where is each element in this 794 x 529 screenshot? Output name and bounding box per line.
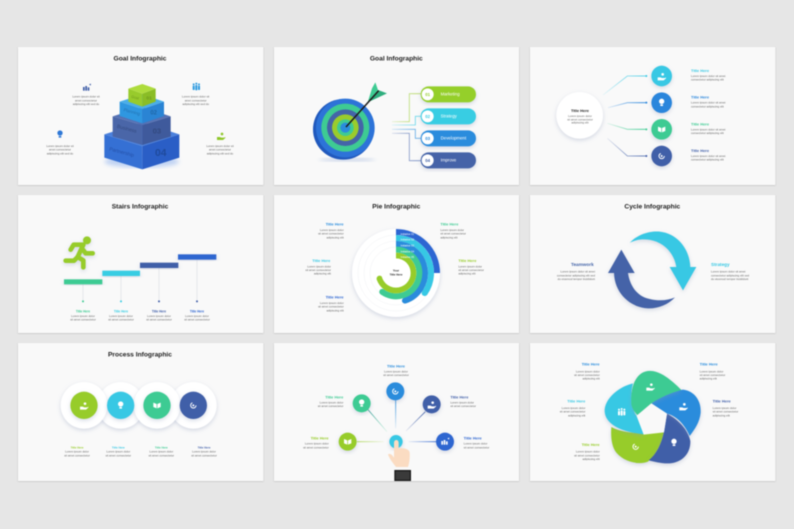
- text 1: [691, 68, 726, 82]
- target shadow: [319, 158, 375, 161]
- pill: marketing: Marketing: [441, 92, 460, 97]
- text 4: Lorem ipsum dolor: [185, 314, 209, 318]
- heading: Process Infographic: [108, 352, 172, 359]
- text 1: [70, 310, 96, 322]
- stems: [83, 260, 197, 301]
- text upper left: [318, 394, 344, 408]
- circle 2: [107, 392, 134, 419]
- central text: sit amet consectetur: [567, 117, 593, 121]
- pill: strategy: 02: [425, 114, 431, 119]
- text mid left: [305, 258, 331, 276]
- text top: [383, 363, 409, 377]
- panel: goal infographic target: [274, 47, 519, 185]
- text teamwork: consectetur adipiscing elit sed: [557, 273, 595, 277]
- text mid right: sit amet consectetur: [458, 268, 484, 272]
- text 3: [149, 445, 174, 457]
- panel: hub with four nodes: [530, 47, 775, 185]
- text bottom left: [574, 442, 600, 461]
- text lower right: sit amet consectetur: [464, 445, 489, 449]
- central text: adipiscing elit: [571, 121, 589, 125]
- text strategy: consectetur adipiscing elit sed: [711, 273, 750, 277]
- text 2: sit amet consectetur: [106, 453, 131, 457]
- text 4: Title Here: [190, 310, 204, 314]
- text mid left: sit amet consectetur: [560, 410, 585, 414]
- petal cyan: [605, 383, 644, 434]
- text top right: Lorem ipsum dolor: [700, 369, 723, 373]
- text 2: [106, 445, 131, 457]
- stacked pyramid: Goal: [131, 95, 139, 101]
- text 1: sit amet consectetur: [70, 318, 96, 322]
- concentric white disc: [352, 229, 440, 317]
- pill: marketing: 01: [425, 92, 431, 97]
- stair 2: [102, 271, 140, 276]
- stacked pyramid: Planning: [123, 107, 141, 116]
- pill: development: Development: [441, 136, 467, 141]
- text lower right: Title Here: [464, 436, 483, 441]
- node royal blue: [436, 433, 454, 451]
- text top right: sit amet consectetur: [700, 373, 725, 377]
- text mid left: Title Here: [312, 258, 331, 263]
- text mid left: Lorem ipsum dolor: [562, 406, 585, 410]
- text 4: sit amet consectetur: [184, 318, 210, 322]
- text strategy: Strategy: [711, 262, 730, 267]
- text teamwork: Lorem ipsum dolor sit amet: [561, 270, 595, 274]
- text top right: Title Here: [440, 222, 459, 227]
- text top: Lorem ipsum dolor: [384, 369, 408, 373]
- stair 4: [178, 254, 216, 260]
- stacked pyramid: 01: [146, 95, 152, 101]
- text top right: [440, 222, 466, 239]
- text top left: [574, 362, 600, 381]
- text top left: adipiscing elit: [582, 377, 600, 381]
- text lower left: sit amet consectetur: [303, 445, 329, 449]
- text 1: consectetur adipiscing elit: [691, 78, 724, 82]
- text bottom left: sit amet consectetur: [574, 453, 600, 457]
- text upper left: Title Here: [325, 394, 344, 399]
- icon: hand: [217, 133, 225, 140]
- stacked pyramid: Business: [116, 124, 138, 135]
- stacked pyramid: 04: [155, 148, 167, 159]
- panel: goal infographic pyramid: [18, 47, 263, 185]
- heading: Stairs Infographic: [112, 203, 169, 210]
- text top left: Title Here: [582, 362, 600, 367]
- centre hole: [637, 403, 667, 435]
- text 2: [691, 95, 726, 108]
- text upper right: sit amet consectetur: [450, 404, 476, 408]
- text 4: [691, 148, 726, 162]
- text 4: Lorem ipsum dolor sit amet: [691, 154, 726, 158]
- text top right: adipiscing elit: [440, 235, 458, 239]
- centre: Your: [393, 268, 400, 272]
- text bottom left: adipiscing elit: [326, 308, 344, 312]
- stacked pyramid: 03: [153, 126, 161, 135]
- text 1: sit amet consectetur: [64, 453, 90, 457]
- arc labels: Initiative 03: [401, 244, 415, 248]
- heading: Pie Infographic: [372, 203, 421, 210]
- text 1: Title Here: [691, 68, 710, 73]
- panel: radial hand infographic: [274, 343, 519, 481]
- text 4: Title Here: [691, 148, 710, 153]
- text 2: sit amet consectetur: [108, 318, 134, 322]
- text bottom left: Title Here: [326, 295, 344, 300]
- text 1: Lorem ipsum dolor: [65, 450, 89, 454]
- text block top right: Lorem ipsum dolor sit: [182, 95, 210, 99]
- arc labels: [401, 232, 415, 259]
- text upper right: Lorem ipsum dolor: [450, 400, 474, 404]
- circle 3: [143, 392, 171, 419]
- pill: strategy: [421, 108, 476, 124]
- pyramid base shadow: [104, 156, 179, 168]
- text 3: Title Here: [155, 445, 168, 449]
- ring 2: [97, 382, 144, 429]
- node 2: [651, 92, 672, 113]
- text bottom left: Lorem ipsum dolor: [576, 450, 600, 454]
- text mid right: sit amet consectetur: [713, 410, 738, 414]
- text 3: Lorem ipsum dolor: [147, 314, 171, 318]
- text mid right: [713, 398, 738, 417]
- petal green: [631, 371, 681, 415]
- connectors: [603, 75, 647, 157]
- text mid left: Title Here: [567, 398, 586, 403]
- stacked pyramid: 02: [150, 110, 158, 116]
- text 1: Title Here: [76, 310, 90, 314]
- text bottom left: Title Here: [582, 442, 600, 447]
- text lower left: Title Here: [311, 436, 329, 441]
- connectors: [392, 94, 422, 161]
- panel: pie infographic: [274, 195, 519, 333]
- text bottom left: Lorem ipsum dolor: [320, 301, 344, 305]
- text mid right: [458, 258, 484, 276]
- text block bottom right: Lorem ipsum dolor sit: [206, 144, 234, 148]
- text mid left: [560, 398, 586, 417]
- text top left: sit amet consectetur: [318, 232, 344, 236]
- text mid right: Lorem ipsum dolor: [713, 406, 736, 410]
- arrow: teamwork: [608, 250, 675, 308]
- text mid right: Title Here: [713, 398, 732, 403]
- node 1: [651, 66, 672, 86]
- text top: Title Here: [387, 363, 406, 368]
- text top right: sit amet consectetur: [440, 232, 466, 236]
- icon: chart: [83, 84, 91, 91]
- text mid right: Lorem ipsum dolor: [458, 264, 482, 268]
- text block top right: amet consectetur: [185, 98, 207, 102]
- text 3: sit amet consectetur: [146, 318, 172, 322]
- ring 3: [134, 382, 180, 429]
- text top: sit amet consectetur: [383, 373, 409, 377]
- text block bottom right: adipiscing elit sed do: [207, 151, 234, 155]
- text block top left: amet consectetur: [75, 98, 97, 102]
- text strategy: [711, 262, 750, 281]
- central text: Title Here: [571, 108, 590, 113]
- text block top left: adipiscing elit sed do: [73, 102, 100, 106]
- icon: people: [193, 83, 200, 90]
- panel: five petal cycle: [530, 343, 775, 481]
- text top left: [318, 222, 344, 239]
- panel: cycle infographic: [530, 195, 775, 333]
- text 2: Lorem ipsum dolor: [106, 450, 130, 454]
- text upper left: Lorem ipsum dolor: [320, 400, 343, 404]
- text teamwork: [557, 262, 595, 281]
- stacked pyramid: [104, 84, 179, 169]
- ring 1: [61, 382, 107, 429]
- text block bottom left: Lorem ipsum dolor sit: [46, 144, 74, 148]
- text block bottom left: amet consectetur: [49, 148, 71, 152]
- text 3: [691, 121, 726, 135]
- text lower left: [303, 436, 329, 449]
- text upper right: Title Here: [450, 394, 469, 399]
- text mid right: Title Here: [458, 258, 477, 263]
- text top left: adipiscing elit: [326, 235, 344, 239]
- text lower right: [464, 436, 489, 449]
- circle 1: [70, 392, 98, 419]
- text top right: [700, 362, 725, 381]
- text mid left: Lorem ipsum dolor: [307, 264, 331, 268]
- heading: Goal Infographic: [114, 55, 167, 62]
- text 1: Lorem ipsum dolor sit amet: [691, 74, 726, 78]
- pill: development: 03: [425, 136, 431, 141]
- text 3: [146, 310, 172, 322]
- text mid right: adipiscing elit: [458, 272, 476, 276]
- centre node: [389, 435, 403, 448]
- text top left: sit amet consectetur: [574, 373, 600, 377]
- text 3: Lorem ipsum dolor sit amet: [691, 127, 726, 131]
- text upper right: [450, 394, 476, 408]
- panel: process infographic: [18, 343, 263, 481]
- text 1: [64, 445, 90, 457]
- petal navy: [649, 414, 690, 463]
- ring arcs: [377, 232, 437, 304]
- text 1: Lorem ipsum dolor: [71, 314, 95, 318]
- text upper left: sit amet consectetur: [318, 404, 343, 408]
- node navy: [423, 395, 441, 413]
- text block bottom right: amet consectetur: [209, 148, 231, 152]
- text mid left: sit amet consectetur: [305, 268, 331, 272]
- dots: [82, 300, 198, 302]
- pill: improve: [421, 152, 476, 168]
- arrow: strategy: [630, 231, 696, 290]
- pill: improve: Improve: [441, 158, 457, 163]
- node blue: [386, 382, 404, 400]
- connectors: [357, 400, 436, 442]
- arc labels: Initiative 02: [401, 238, 415, 242]
- node 3: [651, 119, 672, 140]
- text block top right: adipiscing elit sed do: [182, 102, 209, 106]
- text mid left: adipiscing elit: [314, 272, 331, 276]
- text 2: Lorem ipsum dolor: [109, 314, 133, 318]
- text 4: sit amet consectetur: [191, 453, 217, 457]
- central circle: [556, 92, 603, 139]
- centre: [381, 258, 411, 288]
- text top right: adipiscing elit: [700, 377, 717, 381]
- circle 4: [180, 392, 207, 419]
- text block bottom left: adipiscing elit sed do: [47, 151, 74, 155]
- text 4: consectetur adipiscing elit: [691, 158, 724, 162]
- text lower left: Lorem ipsum dolor: [305, 442, 329, 446]
- text top left: Lorem ipsum dolor: [576, 369, 600, 373]
- text 2: Title Here: [114, 310, 128, 314]
- text strategy: do eiusmod tempor incididunt: [711, 277, 749, 281]
- icon: running figure: [66, 236, 93, 267]
- arc labels: Initiative 05: [401, 255, 415, 259]
- central text: Lorem ipsum dolor: [568, 114, 592, 118]
- text bottom left: [318, 295, 344, 312]
- stair 1: [64, 279, 102, 284]
- node green: [353, 394, 371, 412]
- text 2: Title Here: [691, 95, 710, 100]
- pill: marketing: [421, 86, 476, 102]
- text top right: Lorem ipsum dolor: [440, 228, 464, 232]
- text mid right: adipiscing elit: [713, 413, 730, 417]
- pill: improve: 04: [425, 158, 431, 163]
- text 3: sit amet consectetur: [149, 453, 174, 457]
- stair 3: [140, 263, 178, 268]
- centre: Title Here: [390, 272, 403, 276]
- text lower right: Lorem ipsum dolor: [464, 442, 487, 446]
- petal icons: [618, 383, 688, 449]
- text bottom left: sit amet consectetur: [318, 305, 344, 309]
- text teamwork: Teamwork: [571, 262, 594, 267]
- central text: [567, 108, 593, 125]
- pill: development: [421, 130, 476, 146]
- text 3: Title Here: [152, 310, 166, 314]
- text block top left: Lorem ipsum dolor sit: [72, 95, 100, 99]
- text teamwork: do eiusmod tempor incididunt: [558, 277, 595, 281]
- text 2: [108, 310, 134, 322]
- text 4: [191, 445, 217, 457]
- heading: Cycle Infographic: [624, 203, 681, 210]
- petal blue: [651, 390, 701, 436]
- stacked pyramid: Partnership: [108, 146, 135, 159]
- node 4: [651, 146, 672, 166]
- heading: Goal Infographic: [370, 55, 423, 62]
- pill: strategy: Strategy: [441, 114, 458, 119]
- ring 4: [170, 382, 217, 429]
- text 1: Title Here: [71, 445, 84, 449]
- text 2: Lorem ipsum dolor sit amet: [691, 101, 726, 105]
- arc labels: Initiative 01: [401, 232, 415, 236]
- text strategy: Lorem ipsum dolor sit amet: [711, 270, 746, 274]
- panel: stairs infographic: [18, 195, 263, 333]
- text mid left: adipiscing elit: [568, 413, 586, 417]
- text 4: Lorem ipsum dolor: [192, 450, 216, 454]
- icon: dart arrow: [346, 82, 387, 127]
- text top left: Lorem ipsum dolor: [320, 228, 344, 232]
- text top right: Title Here: [700, 362, 719, 367]
- text 4: [184, 310, 210, 322]
- text 2: consectetur adipiscing elit: [691, 104, 724, 108]
- node green lime: [339, 433, 357, 451]
- petal lime: [611, 427, 664, 463]
- icon: bulb: [57, 130, 63, 138]
- text 2: Title Here: [112, 445, 125, 449]
- target: [313, 99, 375, 160]
- text 3: Title Here: [691, 121, 710, 126]
- text 3: consectetur adipiscing elit: [691, 131, 724, 135]
- text top left: Title Here: [326, 222, 344, 227]
- icon: pointing hand: [388, 440, 411, 481]
- text bottom left: adipiscing elit: [582, 457, 600, 461]
- text 4: Title Here: [198, 445, 211, 449]
- arc labels: Initiative 04: [401, 249, 415, 253]
- text 3: Lorem ipsum dolor: [149, 450, 173, 454]
